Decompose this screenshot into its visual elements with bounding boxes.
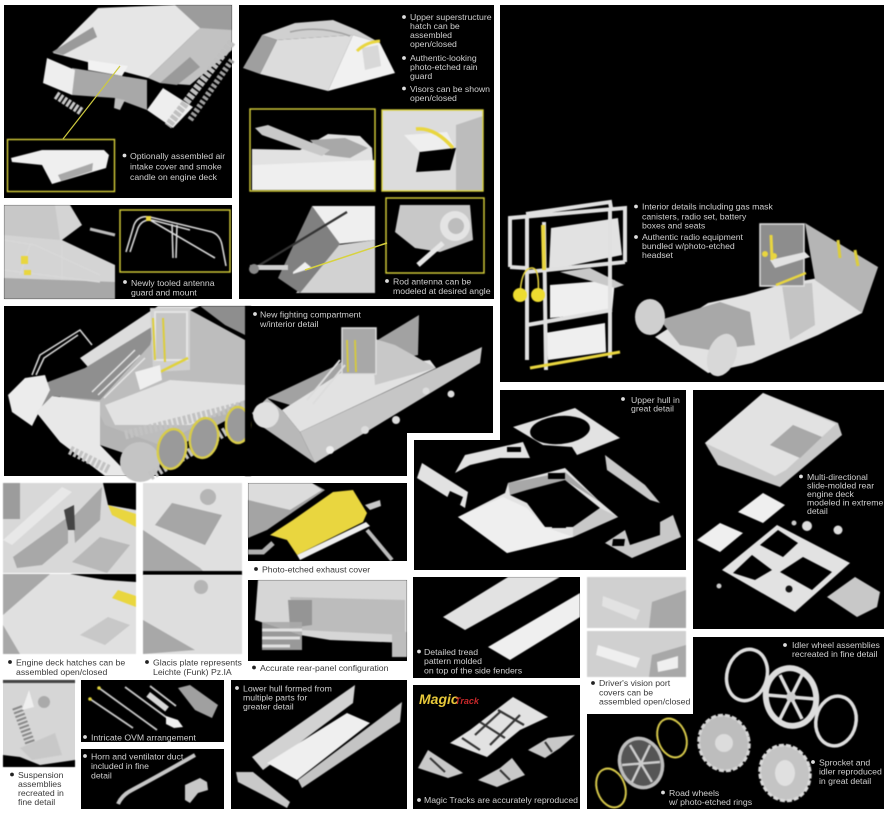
caption: turret features: assembled <box>410 30 452 40</box>
illustration: lower hull with interior <box>252 315 482 463</box>
caption: engine deck: Engine deck hatches can be <box>16 658 125 668</box>
caption: idler wheel <box>783 640 881 659</box>
caption: turret features: Upper superstructure <box>410 12 492 22</box>
photo: glacis with opening <box>143 483 242 575</box>
caption: lower hull: greater detail <box>243 702 294 712</box>
caption: rear deck <box>799 472 883 516</box>
caption: antenna guard: guard and mount <box>131 288 197 298</box>
caption: antenna guard <box>123 278 215 298</box>
caption: suspension: recreated in <box>18 788 64 798</box>
inset: open hatch <box>250 109 375 191</box>
caption: rod antenna: modeled at desired angle <box>393 286 491 296</box>
caption: fenders <box>417 647 523 676</box>
illustration: suspension <box>3 680 75 767</box>
illustration: wheels and rings <box>591 645 861 812</box>
caption: exhaust: Photo-etched exhaust cover <box>262 564 370 574</box>
caption: upper hull: great detail <box>631 404 674 414</box>
panel: lower hull <box>231 680 407 809</box>
caption: air intake <box>123 151 225 182</box>
photo: port open <box>587 631 686 677</box>
caption: antenna guard: Newly tooled antenna <box>131 278 215 288</box>
panel: air intake cover <box>4 5 232 198</box>
caption: interior: Interior details including gas mask <box>642 202 774 212</box>
illustration: duct and horn <box>118 755 208 804</box>
caption: interior: headset <box>642 250 674 260</box>
photo: port closed <box>587 577 686 628</box>
caption: sprocket: in great detail <box>819 776 871 786</box>
inset: antenna mount <box>386 198 484 273</box>
caption: turret features: hatch can be <box>410 21 460 31</box>
caption: horn: detail <box>91 770 112 780</box>
caption: suspension: Suspension <box>18 770 64 780</box>
caption: interior: Authentic radio equipment <box>642 232 744 242</box>
caption: magic tracks: Magic Tracks are accurately reproduced <box>424 795 578 805</box>
illustration: tank with interior <box>8 306 251 482</box>
caption: upper hull: Upper hull in <box>631 395 680 405</box>
illustration: tank rear view <box>43 5 232 128</box>
caption: rear panel: Accurate rear-panel configuration <box>260 663 389 673</box>
caption: fighting compartment: w/interior detail <box>259 319 318 329</box>
caption: road wheels <box>661 788 753 807</box>
caption: engine deck: assembled open/closed <box>16 667 107 677</box>
caption: vision port <box>591 678 690 706</box>
photo: suspension <box>3 680 75 807</box>
caption: rear deck: engine deck <box>807 489 855 499</box>
caption: vision port: assembled open/closed <box>599 696 690 706</box>
caption: interior: canisters, radio set, battery <box>642 212 747 222</box>
illustration: lower hull <box>236 685 402 808</box>
caption: road wheels: Road wheels <box>669 788 720 798</box>
caption: turret features: open/closed <box>410 39 457 49</box>
logo: Magic Track <box>419 691 480 707</box>
photo: exhaust cover <box>248 483 407 574</box>
inset: air intake cover <box>8 140 114 192</box>
caption: turret features: photo-etched rain <box>410 62 478 72</box>
panel: wheels <box>587 637 884 812</box>
photos: glacis plate <box>143 483 243 677</box>
caption: lower hull: Lower hull formed from <box>243 684 332 694</box>
caption: air intake: Optionally assembled air <box>130 151 225 161</box>
caption: rear deck: modeled in extreme <box>807 498 883 508</box>
caption: horn <box>83 752 184 780</box>
panel: rear engine deck <box>693 390 884 629</box>
caption: rod antenna: Rod antenna can be <box>393 276 471 286</box>
caption: idler wheel: Idler wheel assemblies <box>792 640 881 650</box>
panel: side fenders <box>413 577 580 678</box>
illustration: tools <box>88 685 218 730</box>
panel: horn and duct <box>81 749 224 809</box>
illustration: fenders <box>443 577 580 660</box>
illustration: radio rack <box>510 202 625 370</box>
logo: Magic Track: Magic <box>419 691 459 707</box>
photo: hatches open <box>3 483 136 573</box>
caption: vision port: Driver's vision port <box>599 678 671 688</box>
caption: glacis: Glacis plate represents <box>153 658 243 668</box>
caption: fighting compartment <box>253 310 362 329</box>
illustration: rear panel <box>255 580 407 657</box>
caption: horn: included in fine <box>91 761 149 771</box>
panel: interior details <box>500 5 884 382</box>
caption: road wheels: w/ photo-etched rings <box>668 797 753 807</box>
photo: antenna guard on hull <box>4 205 115 299</box>
caption: fenders: on top of the side fenders <box>424 666 523 676</box>
caption: sprocket: idler reproduced <box>819 766 882 776</box>
caption: vision port: covers can be <box>599 688 653 698</box>
caption: horn: Horn and ventilator duct <box>91 752 184 762</box>
caption: OVM: Intricate OVM arrangement <box>91 732 196 742</box>
panel: antenna guard <box>4 205 232 299</box>
pointer line <box>305 243 387 270</box>
caption: turret features <box>402 12 492 103</box>
caption: air intake: intake cover and smoke <box>130 162 222 172</box>
photo: hatches closed <box>3 574 136 654</box>
photos: driver's vision port <box>587 577 690 706</box>
photo: rear panel <box>248 580 407 673</box>
caption: rear deck: Multi-directional <box>807 472 868 482</box>
caption: turret features: Authentic-looking <box>410 53 477 63</box>
panel: fighting compartment <box>4 306 493 482</box>
caption: air intake: candle on engine deck <box>130 172 218 182</box>
caption: suspension <box>10 770 64 807</box>
caption: idler wheel: recreated in fine detail <box>792 649 878 659</box>
caption: rear deck: detail <box>807 506 828 516</box>
illustration: upper hull parts <box>417 408 681 558</box>
pointer line <box>63 66 120 139</box>
illustration: interior assembly <box>635 223 878 380</box>
caption: upper hull <box>621 395 680 414</box>
photos: engine deck hatches <box>3 483 136 677</box>
panel: OVM <box>81 680 224 742</box>
caption: turret features: guard <box>410 71 432 81</box>
illustration: exhaust <box>248 483 392 560</box>
caption: suspension: assemblies <box>18 779 62 789</box>
caption: fighting compartment: New fighting compartment <box>260 310 362 320</box>
illustration: track links <box>418 697 575 787</box>
caption: interior: boxes and seats <box>642 220 706 230</box>
caption: glacis <box>145 658 243 677</box>
caption: sprocket <box>811 758 882 786</box>
caption: fenders: Detailed tread <box>424 647 478 657</box>
photo: glacis closed <box>143 575 242 654</box>
caption: lower hull <box>235 684 332 712</box>
illustration: rear deck parts <box>697 393 880 617</box>
caption: turret features: open/closed <box>410 93 457 103</box>
logo: Magic Track: Track <box>455 696 480 706</box>
caption: fenders: pattern molded <box>424 656 482 666</box>
panel: superstructure <box>239 5 494 299</box>
caption: lower hull: multiple parts for <box>243 692 307 702</box>
caption: engine deck <box>8 658 125 677</box>
caption: rear deck: slide-molded rear <box>807 480 874 490</box>
inset: antenna guard <box>120 210 230 272</box>
caption: sprocket: Sprocket and <box>819 758 870 768</box>
illustration: turret <box>243 20 395 91</box>
panel: magic tracks <box>413 685 580 809</box>
caption: suspension: fine detail <box>18 797 55 807</box>
panel: upper hull <box>414 390 686 570</box>
illustration: rod antenna <box>249 206 375 293</box>
caption: interior: bundled w/photo-etched <box>642 241 735 251</box>
inset: visor <box>382 110 483 191</box>
caption: rod antenna <box>385 276 491 296</box>
caption: glacis: Leichte (Funk) Pz.IA <box>153 667 232 677</box>
caption: interior <box>634 202 774 260</box>
caption: turret features: Visors can be shown <box>410 84 490 94</box>
